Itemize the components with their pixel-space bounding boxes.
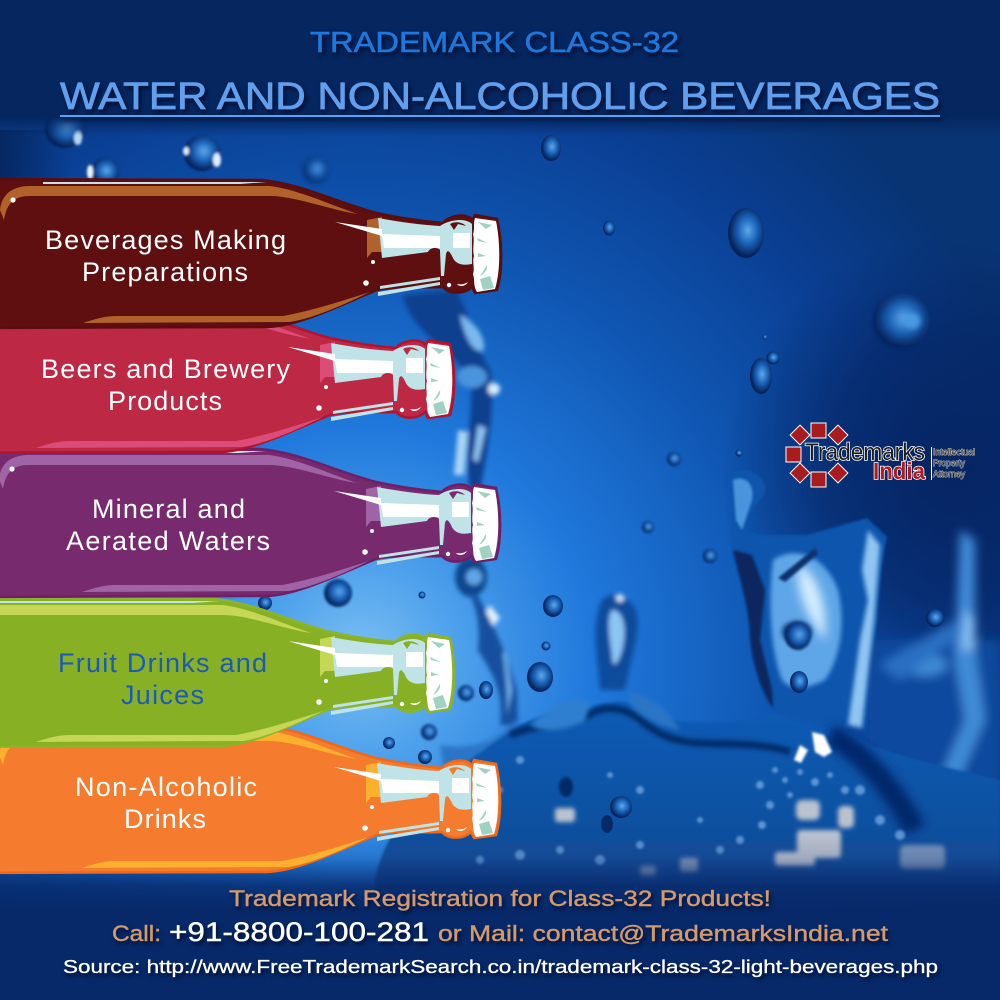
label <box>45 225 286 287</box>
logo tagline <box>933 447 975 479</box>
label: Juices <box>121 680 204 710</box>
logo tagline: Property <box>933 458 965 468</box>
bottle: fruit drinks <box>0 598 454 747</box>
label <box>75 772 257 834</box>
logo wordmark <box>805 439 925 484</box>
label: Preparations <box>82 257 248 287</box>
source line: Source: http://www.FreeTrademarkSearch.co.in/trademark-class-32-light-beverages.php <box>63 957 938 977</box>
crown lobes <box>530 594 680 731</box>
label: Drinks <box>124 804 206 834</box>
main heading: WATER AND NON-ALCOHOLIC BEVERAGES <box>60 76 940 118</box>
foam <box>476 732 945 876</box>
label: Products <box>108 386 222 416</box>
bottom band <box>0 835 1000 1000</box>
bottle: non-alcoholic drinks <box>0 724 500 873</box>
logo wordmark: India <box>873 458 925 484</box>
bottle: beers <box>0 304 454 453</box>
label: Beverages Making <box>45 225 286 255</box>
bottle: beverages making <box>0 179 501 328</box>
label <box>41 354 290 416</box>
label <box>58 648 267 710</box>
logo tagline: Intellectual <box>933 447 975 457</box>
footer contact <box>63 886 938 977</box>
label: Fruit Drinks and <box>58 648 267 678</box>
dark wave band <box>830 735 915 830</box>
logo wordmark: Trademarks <box>805 439 925 466</box>
label: Mineral and <box>92 494 245 524</box>
class heading: TRADEMARK CLASS-32 <box>310 27 679 59</box>
top band <box>0 0 1000 136</box>
upper water stream <box>403 290 500 490</box>
logo: Trademarks India <box>786 423 975 487</box>
water droplets <box>45 108 944 833</box>
right column <box>725 470 887 735</box>
call and mail line: +91-8800-100-281 <box>169 917 429 947</box>
crown ridge <box>510 709 790 752</box>
water splash <box>375 290 1000 900</box>
bottle: mineral waters <box>0 448 500 597</box>
label: Aerated Waters <box>66 526 270 556</box>
registration line: Trademark Registration for Class-32 Products! <box>229 886 771 911</box>
label <box>66 494 270 556</box>
call and mail line <box>112 917 888 947</box>
lower left stream <box>440 557 525 776</box>
far right streams <box>870 530 1000 880</box>
logo tagline: Attorney <box>933 469 965 479</box>
label: Beers and Brewery <box>41 354 290 384</box>
title <box>60 27 940 118</box>
label: Non-Alcoholic <box>75 772 257 802</box>
water mass <box>375 702 1000 900</box>
call and mail line: or Mail: contact@TrademarksIndia.net <box>438 921 888 946</box>
logo emblem <box>786 423 848 487</box>
call and mail line: Call: <box>112 921 161 946</box>
